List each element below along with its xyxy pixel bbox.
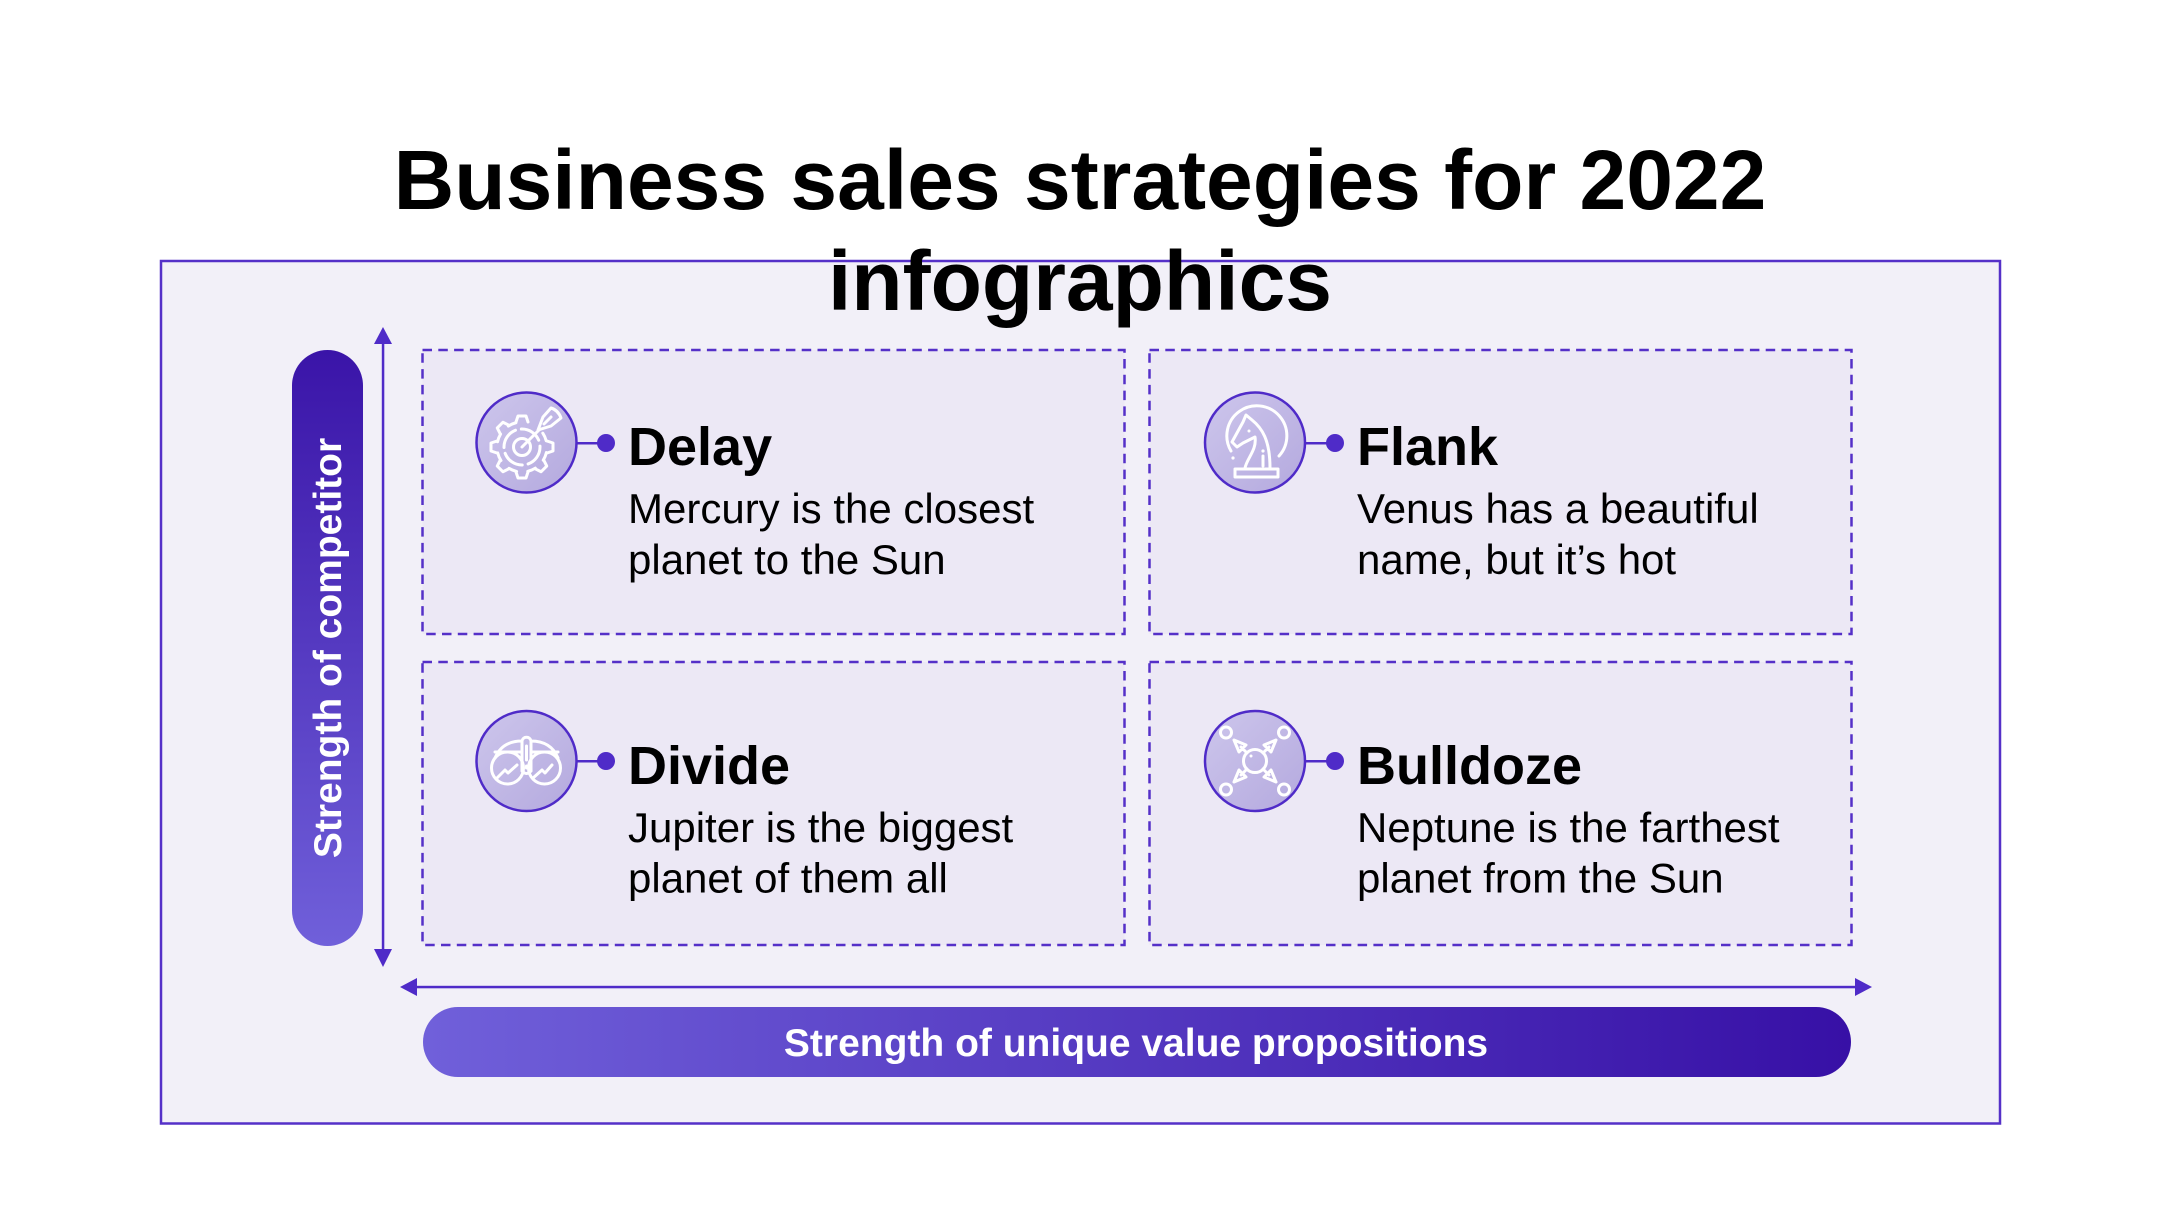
connector: Delay (577, 434, 615, 452)
panel: Divide (422, 662, 1124, 945)
text: Flank description: Venus has a beautiful (1357, 485, 1759, 532)
panel: Bulldoze (1150, 662, 1852, 945)
connector: Bulldoze (1306, 752, 1344, 770)
arrow: horizontal axis (400, 978, 1872, 996)
panel: outer frame (161, 261, 2000, 1124)
axis label: strength of competitor (292, 350, 363, 946)
text: Divide description: planet of them all (628, 854, 948, 902)
axis label: strength of unique value propositions (423, 1007, 1851, 1077)
text: Flank description: name, but it’s hot (1357, 536, 1676, 583)
heading: Divide: Divide (628, 736, 790, 796)
arrow: vertical axis (374, 327, 392, 967)
title: Business sales strategies for 2022 (394, 133, 1766, 227)
panel: Flank (1150, 350, 1852, 634)
axis label: strength of competitor: Strength of competitor (307, 438, 350, 858)
axis label: strength of unique value propositions: Strength of unique value propositions (784, 1022, 1488, 1065)
heading: Delay: Delay (628, 417, 772, 477)
title: infographics (828, 234, 1332, 328)
heading: Bulldoze: Bulldoze (1357, 736, 1582, 796)
panel: Delay (422, 350, 1124, 634)
text: Bulldoze description: planet from the Sun (1357, 854, 1724, 902)
icon: gear with target (476, 392, 576, 492)
text: Delay description: Mercury is the closest (628, 485, 1034, 532)
connector: Divide (577, 752, 615, 770)
icon: binoculars (476, 711, 576, 811)
icon: arrows diverging (1205, 711, 1305, 811)
text: Divide description: Jupiter is the biggest (628, 804, 1014, 851)
text: Bulldoze description: Neptune is the farthest (1357, 804, 1780, 851)
text: Delay description: planet to the Sun (628, 536, 946, 583)
heading: Flank: Flank (1357, 417, 1499, 477)
icon: chess knight (1205, 392, 1305, 492)
connector: Flank (1306, 434, 1344, 452)
